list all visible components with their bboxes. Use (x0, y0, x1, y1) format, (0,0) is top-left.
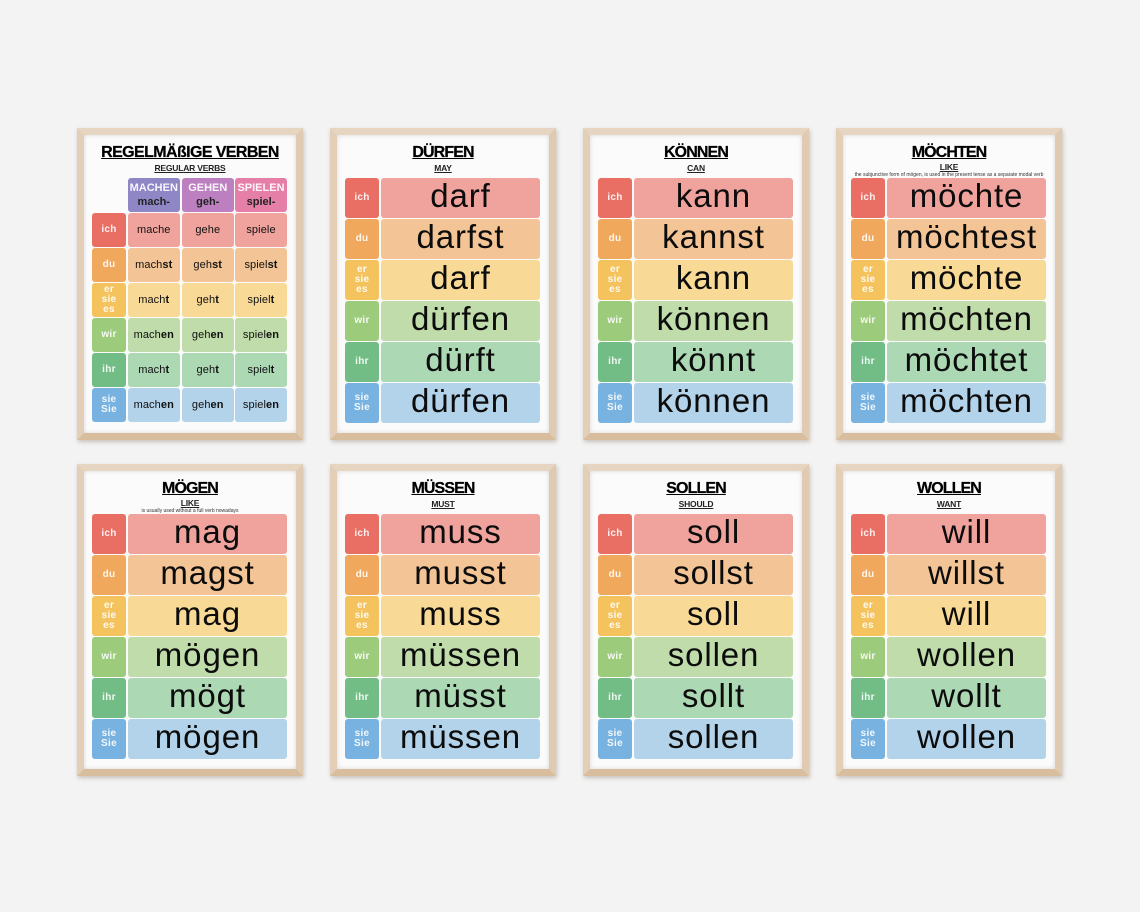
panel: regular verbs: spielen (243, 329, 279, 341)
verb form (128, 719, 287, 758)
pronoun: er sie es: es (356, 620, 368, 631)
pronoun: du: du (609, 233, 621, 244)
pronoun: er sie es: sie (861, 274, 875, 285)
pronoun: wir: wir (860, 651, 876, 662)
pronoun: wir (345, 301, 379, 340)
pronoun: ihr (345, 678, 379, 718)
pronoun: sie Sie: sie (355, 392, 369, 403)
verb form (128, 514, 287, 554)
pronoun: ihr: ihr (355, 356, 369, 367)
pronoun: er sie es: er (610, 264, 620, 275)
pronoun: ihr (598, 342, 632, 382)
pronoun: ich: ich (860, 192, 876, 203)
note: the subjunctive form of mögen, is used in the present tense as a separate modal verb (855, 172, 1043, 178)
verb form: dürfen (411, 382, 510, 419)
verb form: sollst (673, 554, 754, 591)
pronoun: sie Sie (851, 383, 885, 422)
pronoun: ich: ich (860, 528, 876, 539)
verb form (381, 301, 540, 340)
pronoun: wir: wir (101, 329, 117, 340)
pronoun: ihr (851, 678, 885, 718)
verb form (887, 260, 1046, 300)
verb form (128, 637, 287, 676)
pronoun: sie Sie: sie (355, 728, 369, 739)
pronoun: er sie es (851, 596, 885, 636)
pronoun: wir: wir (607, 315, 623, 326)
pronoun: ich: ich (354, 528, 370, 539)
row: sie Sie forms: machen (134, 399, 174, 411)
pronoun: wir (92, 318, 126, 352)
row: er sie es forms (128, 283, 180, 317)
panel: regular verbs: gehe (195, 224, 220, 236)
pronoun: ich: ich (354, 192, 370, 203)
verb form: müsst (414, 677, 507, 714)
panel: regular verbs: gehst (193, 259, 222, 271)
pronoun: er sie es (598, 260, 632, 300)
verb form: will (942, 513, 991, 550)
verb form (887, 637, 1046, 676)
verb form: dürft (425, 341, 496, 378)
title: WOLLEN (917, 480, 981, 497)
column header: spielen: SPIELEN (237, 182, 285, 194)
verb form (634, 678, 793, 718)
verb form: müssen (400, 636, 521, 673)
verb form: müssen (400, 718, 521, 755)
pronoun: ihr: ihr (102, 692, 116, 703)
pronoun: sie Sie: Sie (354, 402, 370, 413)
panel: sollen (583, 464, 809, 776)
verb form: mag (174, 595, 241, 632)
pronoun: ihr (851, 342, 885, 382)
pronoun: wir: wir (354, 651, 370, 662)
pronoun: du (92, 555, 126, 594)
verb form: will (942, 595, 991, 632)
pronoun: wir: wir (101, 651, 117, 662)
title: SOLLEN (666, 480, 726, 497)
verb form (381, 637, 540, 676)
title: MÖGEN (162, 480, 218, 497)
panel: regular verbs: gehen (192, 399, 224, 411)
pronoun: du: du (103, 259, 115, 270)
verb form (634, 383, 793, 422)
pronoun: ihr (598, 678, 632, 718)
column header: machen (128, 178, 180, 212)
verb form: mögen (155, 718, 260, 755)
pronoun: ihr (345, 342, 379, 382)
verb form (634, 219, 793, 258)
verb form: darfst (417, 218, 504, 255)
row: wir forms: machen (134, 329, 174, 341)
verb form: möchten (900, 382, 1033, 419)
verb form (634, 260, 793, 300)
row: ich forms: mache (137, 224, 171, 236)
verb form (634, 596, 793, 636)
pronoun: er sie es (598, 596, 632, 636)
pronoun: sie Sie (598, 383, 632, 422)
subtitle: MUST (431, 499, 455, 509)
pronoun: sie Sie (92, 719, 126, 758)
verb form (381, 555, 540, 594)
pronoun: ich (851, 178, 885, 218)
row: wir forms (128, 318, 180, 352)
panel: regular verbs: geht (197, 294, 219, 306)
panel: können (583, 128, 809, 440)
verb form (381, 178, 540, 218)
pronoun: wir: wir (607, 651, 623, 662)
verb form: soll (687, 513, 740, 550)
pronoun: er sie es: sie (608, 610, 622, 621)
row: sie Sie forms (128, 388, 180, 422)
column header: spielen (235, 178, 287, 212)
pronoun: er sie es: sie (355, 610, 369, 621)
pronoun: du: du (356, 569, 368, 580)
subtitle: MAY (434, 163, 452, 173)
pronoun: ihr: ihr (355, 692, 369, 703)
verb form: mögt (169, 677, 246, 714)
pronoun: sie Sie (92, 388, 126, 422)
pronoun: wir (598, 637, 632, 676)
verb form: willst (928, 554, 1005, 591)
pronoun: sie Sie (851, 719, 885, 758)
verb form: darf (430, 259, 491, 296)
row: ihr forms (128, 353, 180, 387)
pronoun: du: du (356, 233, 368, 244)
verb form: wollen (917, 636, 1016, 673)
pronoun: er sie es: sie (861, 610, 875, 621)
pronoun: ich: ich (101, 224, 117, 235)
verb form (634, 178, 793, 218)
pronoun: er sie es (345, 260, 379, 300)
pronoun: sie Sie: Sie (607, 402, 623, 413)
verb form: könnt (671, 341, 756, 378)
pronoun: er sie es: es (862, 620, 874, 631)
note: is usually used without a full verb nowadays (142, 508, 238, 514)
pronoun: wir: wir (860, 315, 876, 326)
subtitle: REGULAR VERBS (154, 163, 226, 173)
verb form: sollen (668, 636, 759, 673)
pronoun: er sie es (345, 596, 379, 636)
pronoun: ihr: ihr (608, 356, 622, 367)
verb form (634, 637, 793, 676)
verb form: möchte (910, 259, 1023, 296)
verb form (634, 301, 793, 340)
pronoun: du (345, 219, 379, 258)
row: ich forms (128, 213, 180, 247)
pronoun: ich (598, 178, 632, 218)
panel: regular verbs: spielt (248, 364, 274, 376)
verb form (634, 514, 793, 554)
panel: regular verbs: geht (197, 364, 219, 376)
verb form: können (657, 382, 770, 419)
verb form: können (657, 300, 770, 337)
panel: wollen (836, 464, 1062, 776)
pronoun: ich (598, 514, 632, 554)
pronoun: er sie es: es (862, 284, 874, 295)
row: ihr forms: macht (138, 364, 169, 376)
verb form (887, 719, 1046, 758)
pronoun: ich (345, 178, 379, 218)
verb form (887, 596, 1046, 636)
verb form: möchtet (905, 341, 1028, 378)
pronoun: ihr: ihr (102, 364, 116, 375)
column header: gehen (182, 178, 234, 212)
pronoun: ihr (92, 353, 126, 387)
verb form (887, 555, 1046, 594)
verb form: kann (676, 177, 751, 214)
pronoun: du: du (862, 569, 874, 580)
verb form: möchten (900, 300, 1033, 337)
verb form: kannst (662, 218, 765, 255)
pronoun: sie Sie (345, 383, 379, 422)
verb form (128, 596, 287, 636)
verb form (887, 678, 1046, 718)
pronoun: sie Sie: sie (861, 728, 875, 739)
pronoun: er sie es: sie (102, 294, 116, 305)
panel: regular verbs: spielen (243, 399, 279, 411)
verb form (128, 555, 287, 594)
panel: möchten (836, 128, 1062, 440)
verb form: dürfen (411, 300, 510, 337)
row: er sie es forms: macht (138, 294, 169, 306)
pronoun: ich (92, 213, 126, 247)
pronoun: er sie es: er (610, 600, 620, 611)
verb form (381, 383, 540, 422)
pronoun: er sie es: er (104, 284, 114, 295)
pronoun: du (851, 219, 885, 258)
verb form (381, 514, 540, 554)
pronoun: er sie es: er (863, 600, 873, 611)
pronoun: sie Sie: sie (861, 392, 875, 403)
pronoun: er sie es: es (356, 284, 368, 295)
panel: müssen (330, 464, 556, 776)
verb form: mögen (155, 636, 260, 673)
panel: mögen (77, 464, 303, 776)
verb form (634, 719, 793, 758)
column header: gehen: GEHEN (188, 182, 227, 194)
title: DÜRFEN (412, 144, 474, 161)
verb form: sollen (668, 718, 759, 755)
pronoun: ihr: ihr (861, 356, 875, 367)
pronoun: wir (345, 637, 379, 676)
column header: spielen: spiel- (247, 196, 275, 208)
panel: regular verbs: spiele (246, 224, 276, 236)
pronoun: ihr (92, 678, 126, 718)
pronoun: sie Sie: Sie (860, 402, 876, 413)
pronoun: sie Sie: sie (608, 392, 622, 403)
panel: regular verbs (77, 128, 303, 440)
pronoun: wir (92, 637, 126, 676)
pronoun: er sie es (92, 596, 126, 636)
verb form (887, 178, 1046, 218)
verb form: magst (160, 554, 255, 591)
pronoun: er sie es: es (103, 304, 115, 315)
pronoun: ich (851, 514, 885, 554)
verb form: möchte (910, 177, 1023, 214)
pronoun: sie Sie: Sie (607, 738, 623, 749)
pronoun: ich (92, 514, 126, 554)
row: du forms: machst (135, 259, 172, 271)
pronoun: du: du (103, 569, 115, 580)
verb form (381, 678, 540, 718)
title: MÖCHTEN (912, 144, 986, 161)
pronoun: sie Sie (598, 719, 632, 758)
pronoun: er sie es: sie (102, 610, 116, 621)
title: KÖNNEN (664, 144, 728, 161)
pronoun: ich: ich (101, 528, 117, 539)
verb form: muss (419, 513, 502, 550)
title: MÜSSEN (411, 480, 475, 497)
verb form (634, 342, 793, 382)
pronoun: wir (851, 301, 885, 340)
pronoun: er sie es: sie (608, 274, 622, 285)
panel: regular verbs: spielt (248, 294, 274, 306)
pronoun: du (598, 219, 632, 258)
pronoun: wir (598, 301, 632, 340)
verb form (381, 260, 540, 300)
pronoun: er sie es: er (104, 600, 114, 611)
column header: machen: MACHEN (130, 182, 178, 194)
verb form: kann (676, 259, 751, 296)
verb form: muss (419, 595, 502, 632)
verb form (128, 678, 287, 718)
verb form (634, 555, 793, 594)
pronoun: er sie es: er (863, 264, 873, 275)
column header: machen: mach- (138, 196, 170, 208)
verb form (381, 596, 540, 636)
verb form: darf (430, 177, 491, 214)
subtitle: SHOULD (679, 499, 713, 509)
pronoun: du (851, 555, 885, 594)
pronoun: du: du (862, 233, 874, 244)
pronoun: wir: wir (354, 315, 370, 326)
pronoun: ihr: ihr (861, 692, 875, 703)
pronoun: er sie es: es (103, 620, 115, 631)
verb form: wollt (931, 677, 1002, 714)
panel: regular verbs: gehen (192, 329, 224, 341)
verb form: mag (174, 513, 241, 550)
pronoun: ich (345, 514, 379, 554)
subtitle: LIKE (181, 498, 199, 508)
verb form (381, 219, 540, 258)
verb form (381, 719, 540, 758)
pronoun: er sie es: er (357, 600, 367, 611)
pronoun: er sie es (92, 283, 126, 317)
pronoun: er sie es: es (609, 620, 621, 631)
column header: gehen: geh- (196, 196, 219, 208)
verb form: sollt (682, 677, 745, 714)
pronoun: er sie es: es (609, 284, 621, 295)
pronoun: du: du (609, 569, 621, 580)
panel: regular verbs: spielst (244, 259, 278, 271)
pronoun: er sie es: sie (355, 274, 369, 285)
pronoun: sie Sie: Sie (354, 738, 370, 749)
pronoun: du (92, 248, 126, 282)
pronoun: sie Sie: Sie (101, 738, 117, 749)
verb form: musst (414, 554, 507, 591)
pronoun: du (345, 555, 379, 594)
pronoun: sie Sie: sie (102, 728, 116, 739)
row: du forms (128, 248, 180, 282)
panel: dürfen (330, 128, 556, 440)
subtitle: LIKE (940, 162, 958, 172)
subtitle: CAN (687, 163, 705, 173)
pronoun: wir (851, 637, 885, 676)
verb form: möchtest (896, 218, 1037, 255)
pronoun: du (598, 555, 632, 594)
subtitle: WANT (937, 499, 961, 509)
pronoun: er sie es (851, 260, 885, 300)
pronoun: ich: ich (607, 528, 623, 539)
pronoun: sie Sie: sie (608, 728, 622, 739)
verb form: wollen (917, 718, 1016, 755)
pronoun: ihr: ihr (608, 692, 622, 703)
verb form (887, 514, 1046, 554)
pronoun: sie Sie: Sie (860, 738, 876, 749)
pronoun: sie Sie: sie (102, 394, 116, 405)
pronoun: er sie es: er (357, 264, 367, 275)
title: REGELMÄßIGE VERBEN (101, 144, 279, 161)
pronoun: ich: ich (607, 192, 623, 203)
pronoun: sie Sie: Sie (101, 404, 117, 415)
pronoun: sie Sie (345, 719, 379, 758)
verb form: soll (687, 595, 740, 632)
verb form (381, 342, 540, 382)
